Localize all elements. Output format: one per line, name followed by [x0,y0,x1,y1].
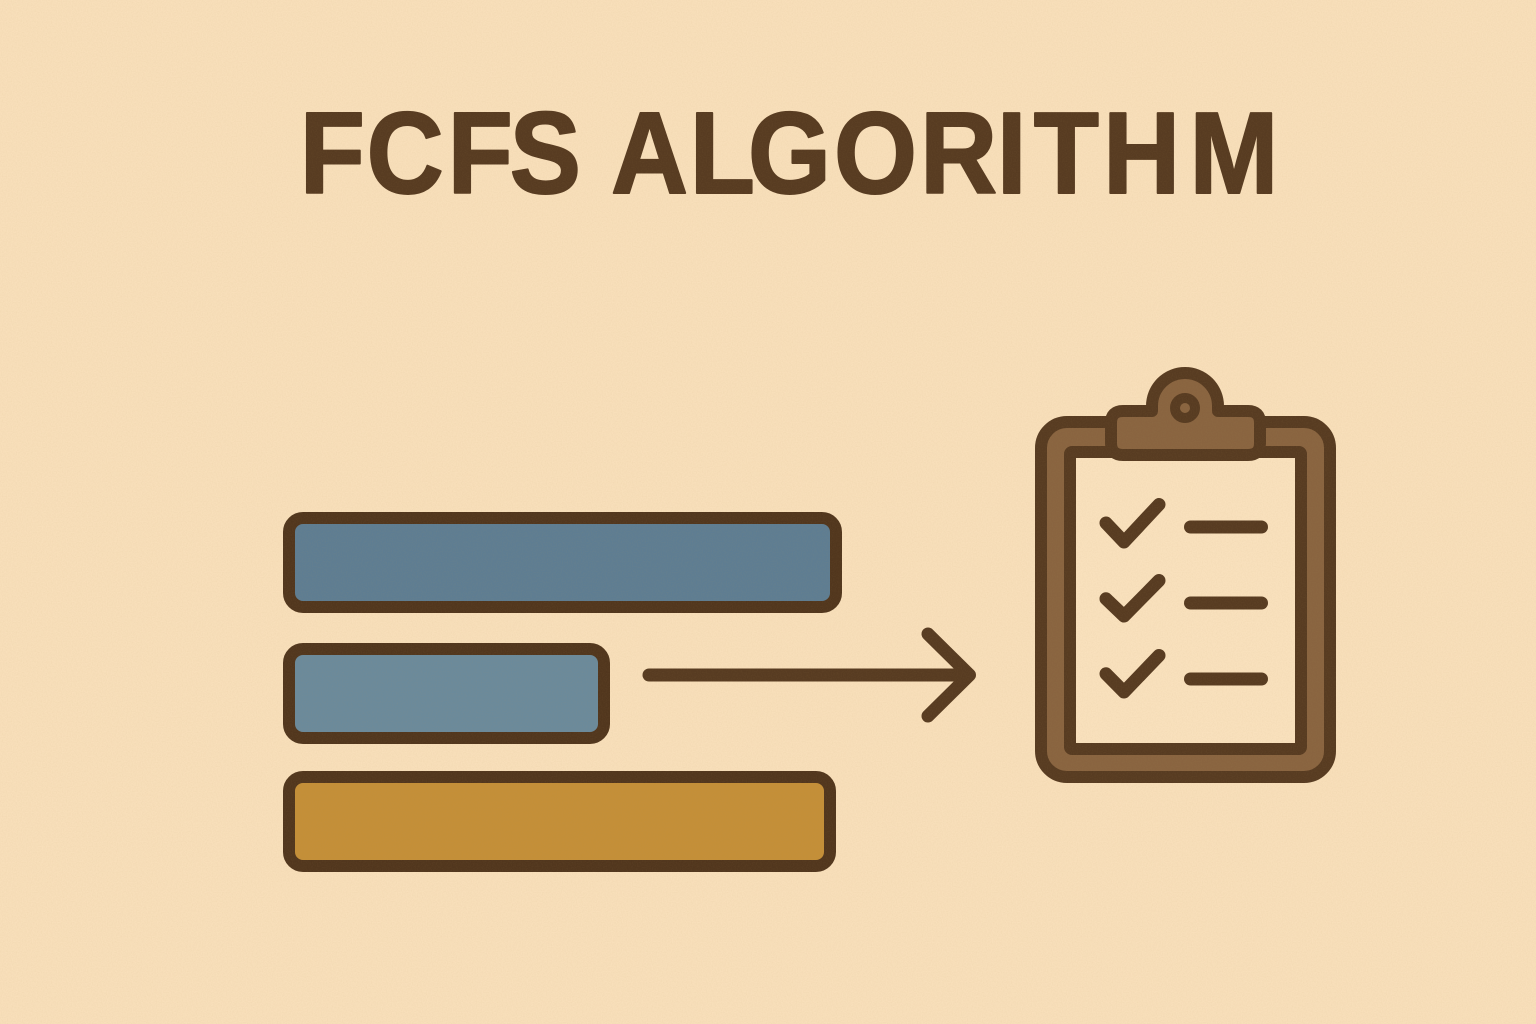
clipboard board [1041,422,1330,777]
title: FCFS ALGORITHM [300,88,1278,218]
icon: clipboard checklist [1041,373,1330,777]
arrow [649,634,970,716]
checklist row 1 [1106,504,1262,542]
clipboard paper [1070,452,1301,749]
clipboard clip [1111,373,1260,455]
checklist row 3 [1106,656,1262,692]
bar: second process [289,649,604,738]
checklist row 2 [1106,580,1262,616]
clip hole [1175,398,1195,418]
process bars [289,518,836,866]
bar: first process [289,518,836,607]
bar: third process [289,777,830,866]
